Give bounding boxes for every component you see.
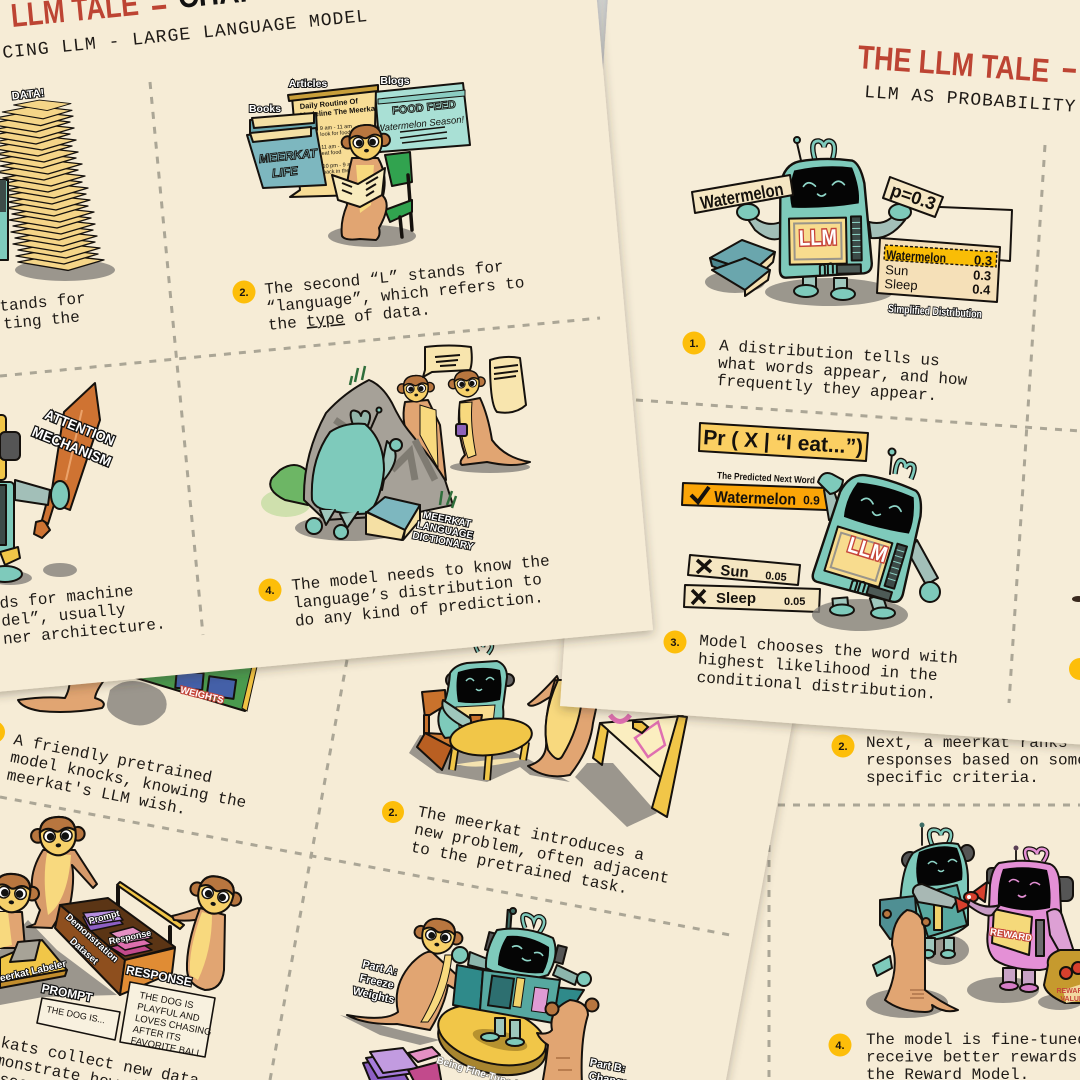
step 3 text top right: conditional distribution.: [696, 669, 937, 704]
title: LLM Tale chapter: [9, 0, 259, 34]
step 2 text lower right: specific criteria.: [866, 769, 1039, 787]
step 3 text top left: ner architecture.: [2, 615, 166, 649]
illustration: conditional distribution: The Predicted Next Word: [717, 470, 815, 487]
illustration: conditional distribution: 0.05: [765, 570, 787, 584]
step 1 text lower left: model knocks, knowing the: [9, 749, 248, 812]
illustration: robot with watermelon probability: 0.4: [972, 281, 992, 297]
illustration: meerkats collecting demonstration dataset: Response: [108, 928, 152, 946]
step 3 text top left: ds for machine: [0, 582, 134, 613]
illustration: conditional distribution: 0.9: [803, 493, 820, 508]
illustration: robot with watermelon probability: 0.3: [973, 267, 992, 283]
illustration: meerkats collecting demonstration dataset: AFTER ITS: [132, 1024, 182, 1044]
step 4 text lower right: 4.: [835, 1040, 845, 1052]
step 2 text top left: 2.: [239, 287, 249, 299]
illustration: teal robot, meerkat and reward candy: [866, 822, 987, 1018]
illustration: robot with watermelon probability: Watermelon: [699, 179, 785, 213]
illustration fragment: meerkat and board with weights: WEIGHTS: [179, 685, 225, 706]
dividers lower right sheet: [769, 805, 1080, 1080]
step 2 text lower left: new problem, often adjacent: [413, 821, 671, 888]
illustration: meerkats collecting demonstration dataset: [0, 816, 245, 1061]
step 4 text top left: do any kind of prediction.: [294, 589, 544, 631]
illustration: robot at table with meerkat and easel: [409, 643, 687, 827]
step 1 text top left: ting the: [2, 308, 81, 334]
illustration: meerkats collecting demonstration dataset: Prompt: [87, 908, 121, 926]
illustration: robot with watermelon probability: Sun: [885, 262, 909, 278]
illustration: stack of data papers: DATA!: [11, 87, 45, 103]
illustration: meerkat reading books, articles and blogs: [247, 75, 470, 247]
step 1 text top left: [0, 290, 88, 334]
step 4 text top left: The model needs to know the: [291, 552, 551, 595]
step 2 text lower right: 2.: [838, 741, 848, 753]
illustration: meerkat reading books, articles and blogs: LIFE: [271, 164, 300, 180]
step 3 text top left: [0, 579, 166, 649]
illustration: robot with attention mechanism sword: ATTENTION: [43, 406, 117, 449]
dividers lower left sheet: [0, 660, 730, 1080]
step 1 text top right: A distribution tells us: [719, 337, 940, 370]
illustration: stack of data papers: [0, 87, 115, 281]
step 2 text lower left: 2.: [388, 807, 398, 819]
step 3 text top right: highest likelihood in the: [697, 650, 938, 685]
illustration: meerkat reading books, articles and blogs: Watermelon Season!: [375, 114, 465, 135]
illustration: fine-tuning robot on platform: [340, 908, 630, 1080]
illustration: fine-tuning robot on platform: Part B:: [589, 1057, 626, 1075]
step 3 text top right: [664, 630, 959, 705]
step 4 text top left: [258, 552, 554, 631]
dividers top left sheet: [0, 82, 600, 635]
step 2 text lower right: [832, 734, 1080, 787]
illustration: meerkats collecting demonstration dataset: RESPONSE: [125, 963, 193, 989]
illustration: meerkat reading books, articles and blogs: Books: [249, 103, 281, 115]
step badge 4 fragment and illustration edge: [1069, 596, 1080, 680]
illustration: meerkats collecting demonstration dataset: LOVES CHASING: [134, 1013, 212, 1038]
illustration: meerkats collecting demonstration dataset: Dataset: [67, 936, 101, 967]
step badge 1 fragment: [0, 721, 5, 743]
step 2 text top left: The second “L” stands for: [264, 258, 504, 299]
illustration: meerkat reading books, articles and blogs: Blogs: [380, 75, 410, 87]
illustration: fine-tuning robot on platform: Part A:: [361, 959, 399, 978]
illustration: pink reward robot with basket: [967, 846, 1080, 1010]
step 2 text lower left: [382, 801, 674, 906]
illustration: conditional distribution: 0.05: [784, 596, 805, 608]
step 2 text top left: the type of data.: [267, 301, 431, 335]
step 2 text lower right: Next, a meerkat ranks: [866, 734, 1068, 752]
illustration: meerkats collecting demonstration dataset: PLAYFUL AND: [136, 1001, 201, 1024]
illustration: meerkat reading books, articles and blogs: MEERKAT: [258, 146, 319, 166]
illustration: conditional distribution: Sun: [720, 562, 749, 581]
step 3 text top right: Model chooses the word with: [699, 632, 959, 668]
subtitle: LLM as probability: LLM AS PROBABILITY: [864, 83, 1077, 118]
illustration: meerkat reading books, articles and blogs: look for food: [320, 130, 351, 138]
illustration fragment: meerkat and board with weights: [18, 660, 258, 726]
dividers top right sheet: [636, 145, 1080, 703]
step 1 text lower left: A friendly pretrained: [12, 731, 213, 787]
illustration: conditional distribution: LLM: [845, 532, 891, 567]
step 2 text lower left: to the pretrained task.: [409, 839, 629, 898]
illustration: meerkats collecting demonstration dataset: THE DOG IS: [138, 990, 194, 1011]
page: lower left sheet: [0, 600, 815, 1080]
illustration: pink reward robot with basket: REWARD: [989, 927, 1033, 944]
illustration: robot hiding at rock with meerkats: DICTIONARY: [411, 530, 474, 553]
step 4 text top left: 4.: [265, 585, 275, 597]
illustration: meerkat reading books, articles and blogs: back in the burrow: [323, 167, 368, 176]
illustration: meerkat reading books, articles and blogs: Daily Routine Of: [299, 96, 359, 111]
step 2 text lower left: The meerkat introduces a: [416, 803, 646, 865]
illustration: fine-tuning robot on platform: Freeze: [358, 972, 395, 992]
illustration: meerkats collecting demonstration dataset: PROMPT: [40, 981, 94, 1005]
illustration: meerkat reading books, articles and blogs: 9 am - 11 am: [320, 124, 352, 132]
step 1 text lower left: meerkat's LLM wish.: [5, 767, 188, 819]
illustration: meerkat reading books, articles and blogs: eat food: [321, 150, 342, 157]
step 3 text top left: del”, usually: [0, 601, 127, 631]
step 4 text lower right: [828, 1031, 1080, 1080]
step 4 text top left: language’s distribution to: [292, 571, 543, 613]
illustration: conditional distribution: [682, 423, 940, 631]
illustration: robot with watermelon probability: 0.3: [974, 252, 993, 268]
illustration: conditional distribution: Pr ( X | “I eat...”): [703, 426, 864, 459]
illustration: robot hiding at rock with meerkats: LANGUAGE: [416, 520, 474, 542]
illustration: conditional distribution: Sleep: [716, 590, 756, 607]
illustration: robot with watermelon probability: p=0.3: [888, 180, 939, 214]
illustration: meerkat reading books, articles and blogs: 10 pm - 9 am: [322, 162, 356, 170]
subtitle: introducing LLM, large language model: CING LLM - LARGE LANGUAGE MODEL: [2, 7, 369, 64]
step 1 text top left: tands for: [0, 290, 87, 316]
page: top right sheet, LLM as probability: [560, 0, 1080, 746]
illustration: meerkat reading books, articles and blogs: 11 am - 1 pm: [321, 143, 354, 151]
step 1 text top right: [682, 332, 969, 407]
illustration: meerkats collecting demonstration dataset: FAVORITE BALL.: [130, 1035, 205, 1060]
step 2 text top left: “language”, which refers to: [265, 274, 525, 317]
illustration: fine-tuning robot on platform: Weights: [351, 985, 396, 1006]
step 2 text top left: [232, 256, 527, 335]
step 1 text lower left: [5, 731, 251, 830]
illustration: meerkat reading books, articles and blogs: Articles: [289, 78, 327, 90]
illustration: robot with watermelon probability: Watermelon: [886, 247, 947, 266]
step 1 text top right: what words appear, and how: [717, 354, 968, 390]
illustration: meerkat reading books, articles and blogs: Madeline The Meerkat: [299, 104, 378, 120]
illustration: robot hiding at rock with meerkats: MEERKAT: [422, 510, 472, 530]
illustration: conditional distribution: Watermelon: [714, 489, 796, 509]
illustration: robot with watermelon probability: Simplified Distribution: [888, 303, 982, 321]
illustration: robot with watermelon probability: Sleep: [884, 276, 918, 293]
illustration: robot with watermelon probability: LLM: [798, 224, 837, 251]
page: lower right sheet: [600, 690, 1080, 1080]
illustration: robot with attention mechanism sword: [0, 383, 117, 585]
step 1 text top right: frequently they appear.: [716, 372, 938, 405]
illustration: meerkats collecting demonstration dataset: Demonstration: [63, 912, 120, 965]
illustration: meerkats collecting demonstration dataset: THE DOG IS...: [46, 1004, 106, 1025]
step 3 text top right: 3.: [670, 637, 680, 649]
illustration: meerkat reading books, articles and blogs: FOOD FEED: [391, 99, 457, 117]
illustration: robot with watermelon probability: [692, 137, 1012, 321]
step 1 text top right: 1.: [689, 338, 699, 350]
page: top left sheet, introducing LLM: [0, 0, 653, 703]
illustration: robot hiding at rock with meerkats: [261, 346, 530, 553]
illustration: robot with attention mechanism sword: MECHANISM: [30, 423, 114, 470]
